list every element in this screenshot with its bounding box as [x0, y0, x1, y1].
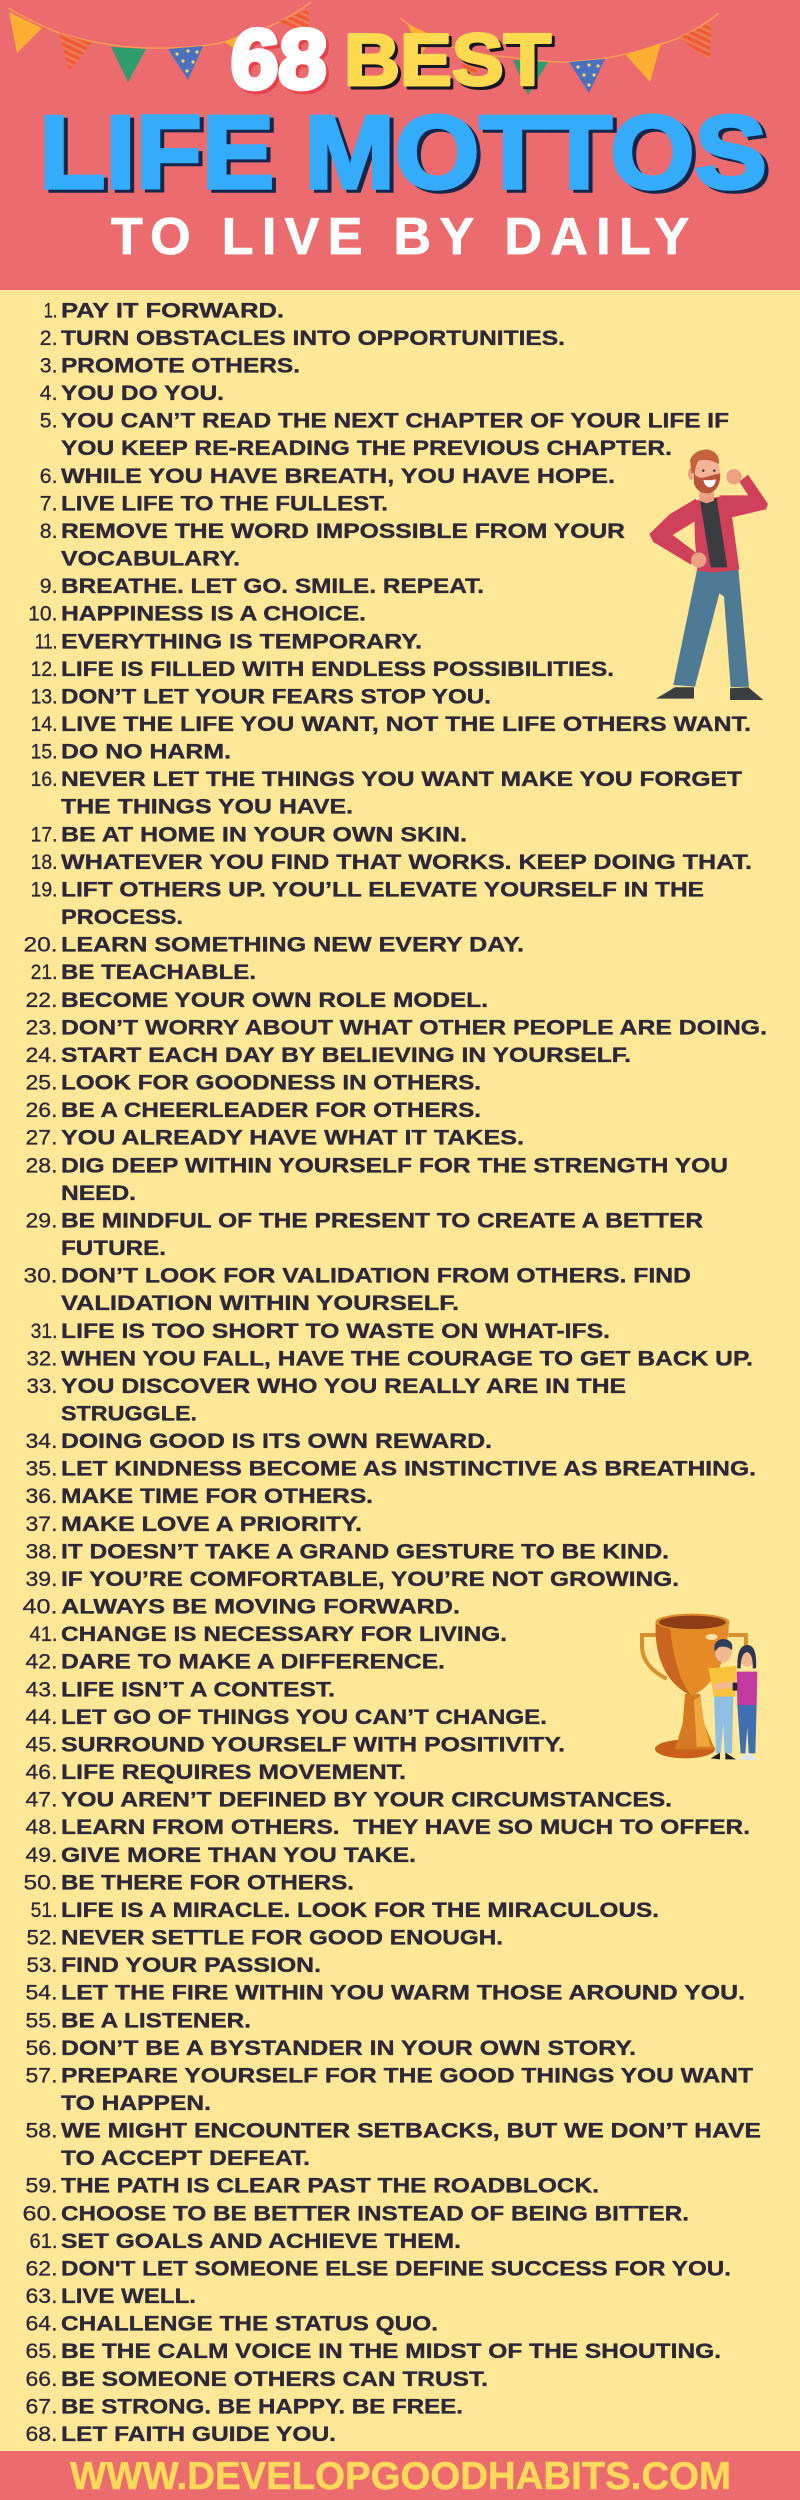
motto 9: BREATHE. LET GO. SMILE. REPEAT. [61, 573, 484, 598]
motto 25: LOOK FOR GOODNESS IN OTHERS. [61, 1070, 481, 1094]
motto 14: LIVE THE LIFE YOU WANT, NOT THE LIFE OTHERS WANT. [61, 711, 751, 736]
motto 12: 12. [31, 656, 58, 681]
motto 25: 25. [26, 1070, 58, 1094]
motto 51: LIFE IS A MIRACLE. LOOK FOR THE MIRACULOUS. [61, 1897, 659, 1922]
motto 38: 38. [26, 1538, 58, 1563]
motto 40: ALWAYS BE MOVING FORWARD. [61, 1594, 460, 1619]
motto 62: 62. [26, 2256, 58, 2280]
motto 30 [24, 1263, 691, 1315]
motto 19 [31, 876, 704, 929]
motto 68: LET FAITH GUIDE YOU. [61, 2421, 336, 2446]
motto 30: 30. [24, 1263, 58, 1288]
motto 32: WHEN YOU FALL, HAVE THE COURAGE TO GET BACK UP. [61, 1345, 753, 1370]
bunting: right string [400, 13, 719, 95]
motto 52: NEVER SETTLE FOR GOOD ENOUGH. [61, 1924, 503, 1950]
motto 15: DO NO HARM. [61, 739, 231, 764]
motto list [22, 297, 767, 2446]
motto 27: YOU ALREADY HAVE WHAT IT TAKES. [61, 1125, 524, 1150]
motto 20: LEARN SOMETHING NEW EVERY DAY. [61, 932, 524, 957]
motto 16 [31, 766, 742, 819]
motto 29: FUTURE. [61, 1235, 166, 1260]
motto 21: BE TEACHABLE. [61, 959, 256, 984]
motto 43: LIFE ISN’T A CONTEST. [61, 1676, 335, 1701]
motto 35: 35. [26, 1456, 58, 1481]
motto 8: REMOVE THE WORD IMPOSSIBLE FROM YOUR [61, 518, 625, 543]
title LIFE MOTTOS: LIFE MOTTOS [43, 98, 771, 214]
motto 24: 24. [26, 1042, 58, 1067]
title word BEST: BEST [344, 20, 551, 101]
couple [708, 1639, 757, 1760]
motto 27: 27. [26, 1125, 58, 1150]
motto 20: 20. [24, 932, 58, 957]
header panel [0, 0, 800, 290]
motto 40: 40. [22, 1594, 58, 1619]
motto 35: LET KINDNESS BECOME AS INSTINCTIVE AS BREATHING. [61, 1456, 756, 1481]
motto 34: 34. [26, 1428, 58, 1453]
motto 64: CHALLENGE THE STATUS QUO. [61, 2311, 438, 2336]
motto 26: BE A CHEERLEADER FOR OTHERS. [61, 1097, 481, 1122]
motto 57: PREPARE YOURSELF FOR THE GOOD THINGS YOU WANT [61, 2062, 753, 2087]
title number 68: 68 [228, 12, 329, 106]
motto 16: 16. [31, 766, 58, 791]
motto 10: 10. [28, 601, 58, 626]
motto 19: 19. [31, 876, 58, 902]
motto 48: 48. [26, 1814, 58, 1839]
motto 61: SET GOALS AND ACHIEVE THEM. [61, 2228, 461, 2253]
motto 13: DON’T LET YOUR FEARS STOP YOU. [61, 683, 491, 708]
motto 41: CHANGE IS NECESSARY FOR LIVING. [61, 1621, 507, 1646]
motto 63: LIVE WELL. [61, 2283, 196, 2308]
motto 58: WE MIGHT ENCOUNTER SETBACKS, BUT WE DON’T HAVE [61, 2118, 761, 2143]
motto 67: 67. [26, 2393, 58, 2418]
motto 8: VOCABULARY. [61, 546, 240, 570]
motto 28: 28. [26, 1152, 58, 1177]
motto 53: 53. [26, 1952, 58, 1977]
motto 54: 54. [26, 1980, 58, 2005]
motto 4: 4. [40, 380, 58, 405]
motto 5: YOU CAN’T READ THE NEXT CHAPTER OF YOUR LIFE IF [61, 408, 729, 433]
motto 53: FIND YOUR PASSION. [61, 1952, 321, 1977]
footer url: WWW.DEVELOPGOODHABITS.COM [70, 2455, 731, 2498]
icon: man flexing [649, 449, 768, 700]
motto 7: LIVE LIFE TO THE FULLEST. [61, 490, 388, 515]
motto 58: TO ACCEPT DEFEAT. [61, 2145, 310, 2170]
motto 50: BE THERE FOR OTHERS. [61, 1869, 354, 1894]
motto 26: 26. [26, 1097, 58, 1122]
motto 11: EVERYTHING IS TEMPORARY. [61, 628, 422, 653]
motto 33: 33. [26, 1373, 58, 1398]
motto 63: 63. [26, 2283, 58, 2308]
motto 19: LIFT OTHERS UP. YOU’LL ELEVATE YOURSELF IN THE [61, 876, 704, 902]
motto 59: THE PATH IS CLEAR PAST THE ROADBLOCK. [61, 2173, 599, 2198]
motto 18: 18. [31, 849, 58, 874]
motto 28 [26, 1152, 728, 1205]
motto 39: 39. [26, 1566, 58, 1591]
motto 16: NEVER LET THE THINGS YOU WANT MAKE YOU FORGET [61, 766, 742, 791]
motto 34: DOING GOOD IS ITS OWN REWARD. [61, 1428, 492, 1453]
motto 17: BE AT HOME IN YOUR OWN SKIN. [61, 821, 467, 846]
title LIFE MOTTOS: LIFE MOTTOS [39, 95, 767, 211]
icon: trophy with couple [642, 1614, 757, 1760]
motto 68: 68. [26, 2421, 58, 2446]
motto 8 [40, 518, 625, 570]
motto 65: BE THE CALM VOICE IN THE MIDST OF THE SHOUTING. [61, 2338, 721, 2363]
motto 57: 57. [26, 2062, 58, 2087]
motto 44: LET GO OF THINGS YOU CAN’T CHANGE. [61, 1704, 547, 1729]
motto 47: YOU AREN’T DEFINED BY YOUR CIRCUMSTANCES. [61, 1787, 672, 1812]
motto 1: 1. [44, 297, 57, 322]
motto 48: LEARN FROM OTHERS. THEY HAVE SO MUCH TO OFFER. [61, 1814, 750, 1839]
motto 7: 7. [40, 490, 58, 515]
motto 39: IF YOU’RE COMFORTABLE, YOU’RE NOT GROWING. [61, 1566, 679, 1591]
motto 3: 3. [40, 352, 58, 378]
motto 36: MAKE TIME FOR OTHERS. [61, 1483, 373, 1508]
motto 55: 55. [26, 2007, 58, 2032]
motto 3: PROMOTE OTHERS. [61, 352, 300, 378]
motto 29 [26, 1207, 703, 1260]
motto 30: DON’T LOOK FOR VALIDATION FROM OTHERS. FIND [61, 1263, 691, 1288]
motto 46: 46. [26, 1759, 58, 1784]
motto 13: 13. [31, 683, 58, 708]
motto 4: YOU DO YOU. [61, 380, 224, 405]
motto 65: 65. [26, 2338, 58, 2363]
motto 56: 56. [26, 2035, 58, 2060]
motto 28: NEED. [61, 1180, 136, 1205]
motto 51: 51. [31, 1897, 58, 1922]
motto 38: IT DOESN’T TAKE A GRAND GESTURE TO BE KIND. [61, 1538, 669, 1563]
motto 5 [40, 408, 729, 460]
motto 22: 22. [26, 987, 58, 1012]
motto 56: DON’T BE A BYSTANDER IN YOUR OWN STORY. [61, 2035, 636, 2060]
motto 29: BE MINDFUL OF THE PRESENT TO CREATE A BETTER [61, 1207, 703, 1232]
motto 61: 61. [30, 2228, 58, 2253]
motto 49: 49. [26, 1842, 58, 1867]
motto 57 [26, 2062, 753, 2115]
motto 37: MAKE LOVE A PRIORITY. [61, 1511, 362, 1536]
motto 19: PROCESS. [61, 904, 183, 929]
motto 43: 43. [26, 1676, 58, 1701]
title number 68: 68 [231, 15, 332, 109]
motto 31: LIFE IS TOO SHORT TO WASTE ON WHAT-IFS. [61, 1318, 610, 1343]
motto 59: 59. [26, 2173, 58, 2198]
motto 52: 52. [26, 1924, 58, 1950]
motto 32: 32. [26, 1345, 58, 1370]
motto 28: DIG DEEP WITHIN YOURSELF FOR THE STRENGTH YOU [61, 1152, 728, 1177]
motto 55: BE A LISTENER. [61, 2007, 251, 2032]
motto 67: BE STRONG. BE HAPPY. BE FREE. [61, 2393, 463, 2418]
motto 49: GIVE MORE THAN YOU TAKE. [61, 1842, 416, 1867]
motto 1: PAY IT FORWARD. [61, 297, 284, 322]
motto 29: 29. [26, 1207, 58, 1232]
motto 66: 66. [26, 2366, 58, 2391]
motto 2: TURN OBSTACLES INTO OPPORTUNITIES. [61, 325, 565, 350]
motto 58: 58. [26, 2118, 58, 2143]
motto 60: CHOOSE TO BE BETTER INSTEAD OF BEING BITTER. [61, 2200, 689, 2225]
subtitle: TO LIVE BY DAILY [111, 208, 689, 266]
motto 23: 23. [26, 1014, 58, 1039]
motto 45: SURROUND YOURSELF WITH POSITIVITY. [61, 1732, 565, 1756]
motto 47: 47. [26, 1787, 58, 1812]
motto 16: THE THINGS YOU HAVE. [61, 794, 353, 819]
motto 11: 11. [35, 628, 57, 653]
motto 33 [26, 1373, 626, 1426]
motto 45: 45. [26, 1732, 58, 1756]
motto 44: 44. [26, 1704, 58, 1729]
motto 46: LIFE REQUIRES MOVEMENT. [61, 1759, 406, 1784]
motto 57: TO HAPPEN. [61, 2090, 211, 2115]
motto 58 [26, 2118, 761, 2170]
motto 23: DON’T WORRY ABOUT WHAT OTHER PEOPLE ARE DOING. [61, 1014, 767, 1039]
motto 10: HAPPINESS IS A CHOICE. [61, 601, 366, 626]
motto 14: 14. [31, 711, 58, 736]
title word BEST: BEST [347, 23, 554, 104]
motto 2: 2. [40, 325, 58, 350]
motto 21: 21. [31, 959, 58, 984]
motto 12: LIFE IS FILLED WITH ENDLESS POSSIBILITIES. [61, 656, 614, 681]
motto 24: START EACH DAY BY BELIEVING IN YOURSELF. [61, 1042, 631, 1067]
motto 41: 41. [30, 1621, 58, 1646]
motto 60: 60. [22, 2200, 58, 2225]
motto 5: YOU KEEP RE-READING THE PREVIOUS CHAPTER. [61, 435, 672, 460]
motto 31: 31. [31, 1318, 58, 1343]
motto 42: DARE TO MAKE A DIFFERENCE. [61, 1649, 445, 1674]
motto 6: 6. [40, 463, 58, 488]
motto 22: BECOME YOUR OWN ROLE MODEL. [61, 987, 488, 1012]
motto 6: WHILE YOU HAVE BREATH, YOU HAVE HOPE. [61, 463, 615, 488]
motto 5: 5. [40, 408, 58, 433]
footer banner [0, 2451, 800, 2500]
motto 54: LET THE FIRE WITHIN YOU WARM THOSE AROUND YOU. [61, 1980, 745, 2005]
motto 50: 50. [24, 1869, 58, 1894]
motto 15: 15. [31, 739, 58, 764]
motto 37: 37. [26, 1511, 58, 1536]
trophy [642, 1614, 746, 1758]
motto 33: YOU DISCOVER WHO YOU REALLY ARE IN THE [61, 1373, 626, 1398]
motto 18: WHATEVER YOU FIND THAT WORKS. KEEP DOING THAT. [61, 849, 752, 874]
motto 17: 17. [31, 821, 58, 846]
motto 62: DON'T LET SOMEONE ELSE DEFINE SUCCESS FOR YOU. [61, 2256, 731, 2280]
motto 9: 9. [40, 573, 58, 598]
motto 33: STRUGGLE. [61, 1400, 197, 1426]
bunting: left string [8, 2, 311, 82]
motto 8: 8. [40, 518, 58, 543]
motto 64: 64. [26, 2311, 58, 2336]
motto 30: VALIDATION WITHIN YOURSELF. [61, 1290, 459, 1315]
motto 42: 42. [26, 1649, 58, 1674]
motto 36: 36. [26, 1483, 58, 1508]
motto 66: BE SOMEONE OTHERS CAN TRUST. [61, 2366, 488, 2391]
